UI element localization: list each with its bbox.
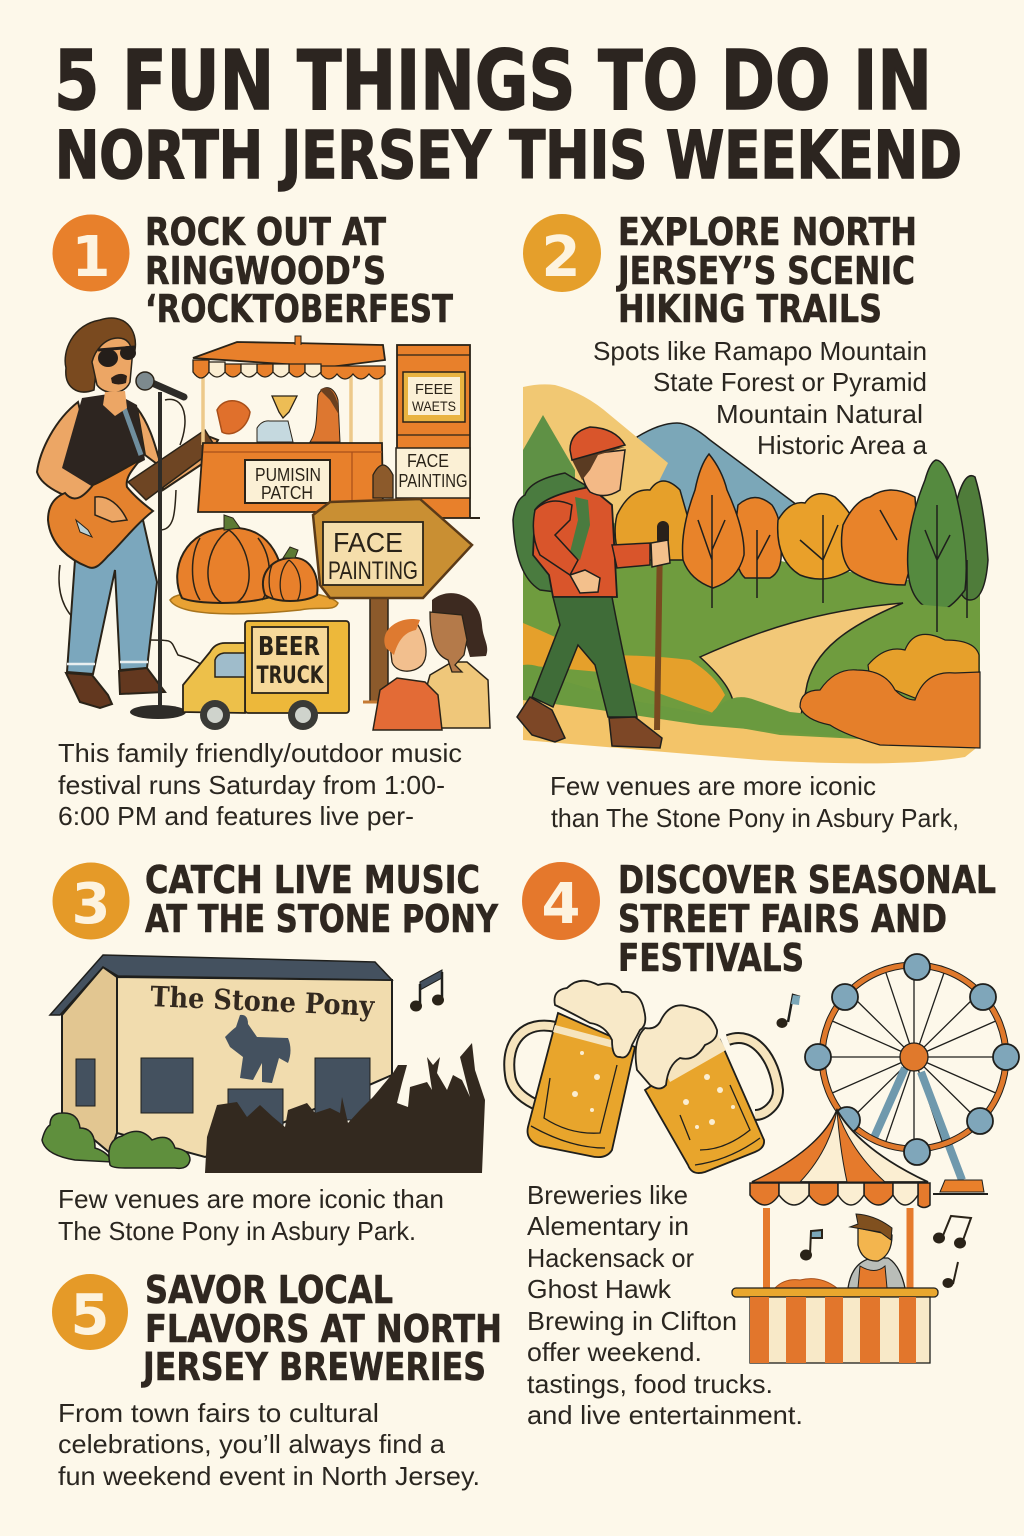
face painting booth panel [396, 345, 480, 518]
section 2 heading [523, 210, 917, 331]
section 5 heading: SAVOR LOCAL [145, 1268, 393, 1312]
face painting booth panel: PAINTING [398, 471, 468, 491]
family [373, 593, 490, 730]
body text 2 top [593, 336, 928, 460]
beer truck [183, 621, 349, 730]
section 3 heading: AT THE STONE PONY [145, 897, 498, 941]
section 2 heading: HIKING TRAILS [618, 287, 882, 331]
body text 4: and live entertainment. [527, 1400, 803, 1430]
face painting booth panel: WAETS [412, 398, 456, 414]
bushes [42, 1113, 190, 1168]
section 5 heading [52, 1268, 502, 1389]
icon: horse [225, 1015, 290, 1083]
body text 4: offer weekend. [527, 1337, 702, 1367]
hiker [513, 427, 670, 748]
body text 5: celebrations, you’ll always find a [58, 1429, 446, 1459]
green ground [523, 500, 980, 745]
illustration: food booth [732, 1110, 971, 1363]
market stall [193, 336, 385, 512]
yellow bush left [523, 623, 725, 713]
body text 2 bottom: Few venues are more iconic [550, 771, 876, 801]
musician [37, 318, 250, 708]
left mug [509, 981, 645, 1157]
section 4 heading: FESTIVALS [618, 936, 804, 980]
body text 4: Ghost Hawk [527, 1274, 672, 1304]
body text 1 [58, 738, 462, 831]
market stall: PUMISIN [255, 465, 321, 485]
body text 4: Alementary in [527, 1211, 689, 1241]
sign post face painting [313, 465, 472, 702]
cables [59, 399, 210, 672]
body text 4: Hackensack or [527, 1243, 694, 1273]
body text 1: 6:00 PM and features live per- [58, 801, 414, 831]
illustration: festival [37, 318, 490, 730]
beer truck: TRUCK [256, 661, 325, 689]
tree trunks [698, 495, 967, 632]
body text 5: From town fairs to cultural [58, 1398, 379, 1428]
section 4 heading [522, 858, 996, 980]
body text 5 [58, 1398, 480, 1491]
body text 4: Breweries like [527, 1180, 688, 1210]
trail [700, 603, 903, 720]
section 4 heading: 4 [542, 872, 580, 937]
body text 4: tastings, food trucks. [527, 1369, 773, 1399]
body text 2 bottom [550, 771, 959, 833]
body text 3: Few venues are more iconic than [58, 1184, 444, 1214]
body text 2 top: Spots like Ramapo Mountain [593, 336, 927, 366]
body text 2 top: Historic Area a [757, 430, 928, 460]
body text 2 top: State Forest or Pyramid [653, 367, 927, 397]
illustration: ferris wheel [805, 954, 1019, 1194]
icon: music notes [801, 1216, 971, 1287]
face painting booth panel: FEEE [415, 381, 453, 398]
body text 4: Brewing in Clifton [527, 1306, 737, 1336]
section 2 heading: EXPLORE NORTH [618, 210, 917, 254]
body text 3: The Stone Pony in Asbury Park. [58, 1216, 416, 1246]
market stall: PATCH [261, 483, 313, 503]
crowd [205, 1043, 485, 1173]
title [54, 34, 962, 194]
green lower strip [523, 665, 843, 737]
right green mound [806, 603, 980, 700]
building [50, 955, 392, 1157]
section 1 heading: 1 [72, 225, 110, 290]
right mug [636, 1005, 778, 1173]
section 2 heading: JERSEY’S SCENIC [616, 249, 915, 293]
section 5 heading: 5 [71, 1283, 109, 1348]
section 3 heading [52, 858, 498, 941]
building: The Stone Pony [150, 980, 376, 1023]
microphone stand [130, 372, 186, 719]
icon: music note small [776, 995, 800, 1028]
body text 5: fun weekend event in North Jersey. [58, 1461, 480, 1491]
sign post face painting: PAINTING [328, 557, 418, 585]
section 1 heading: RINGWOOD’S [145, 249, 386, 293]
autumn trees [615, 454, 988, 612]
section 5 heading: FLAVORS AT NORTH [145, 1307, 502, 1351]
body text 2 bottom: than The Stone Pony in Asbury Park, [551, 803, 959, 833]
icon: music note [410, 970, 444, 1012]
illustration: hiking landscape [513, 384, 988, 763]
bushes [800, 634, 980, 748]
face painting booth panel: FACE [407, 451, 449, 471]
section 1 heading: ‘ROCKTOBERFEST [145, 287, 453, 331]
section 3 heading: CATCH LIVE MUSIC [145, 858, 480, 902]
illustration: beer mugs [509, 981, 778, 1173]
beer truck: BEER [258, 632, 320, 662]
section 1 heading: ROCK OUT AT [145, 210, 386, 254]
body text 1: festival runs Saturday from 1:00- [58, 770, 445, 800]
body text 4 [527, 1180, 803, 1430]
section 1 heading [52, 210, 453, 331]
section 2 heading: 2 [542, 225, 580, 290]
body text 2 top: Mountain Natural [716, 399, 923, 429]
foreground path [523, 700, 980, 763]
distant hills [523, 384, 797, 560]
section 3 heading: 3 [72, 872, 110, 937]
illustration: stone pony venue [42, 955, 485, 1173]
body text 3 [58, 1184, 444, 1246]
sign post face painting: FACE [333, 527, 403, 558]
body text 1: This family friendly/outdoor music [58, 738, 462, 768]
pumpkins [170, 515, 338, 614]
section 5 heading: JERSEY BREWERIES [141, 1345, 486, 1389]
section 4 heading: STREET FAIRS AND [618, 897, 947, 941]
